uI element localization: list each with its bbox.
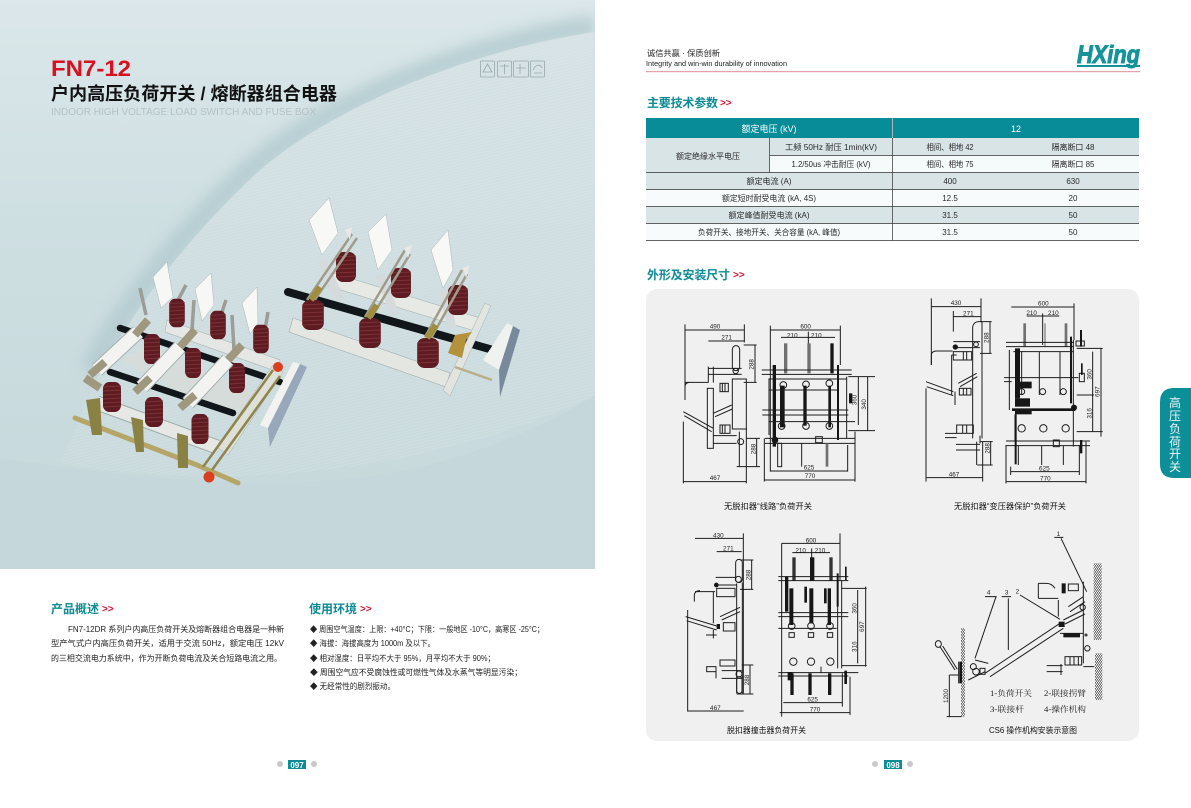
- text block: product overview: 型产气式户内高压负荷开关，适用于交流 50Hz，额定电压 12kV: [51, 638, 285, 648]
- drawing: line load switch: 770: [805, 473, 816, 480]
- logo: HXing: HXing: [1077, 41, 1140, 69]
- side tab: high voltage load switch: 关: [1169, 460, 1181, 474]
- drawing: line load switch: 340: [861, 399, 868, 410]
- side tab: high voltage load switch: 开: [1169, 447, 1181, 461]
- drawing: line load switch: 360: [851, 394, 858, 405]
- table: technical parameters: 额定短时耐受电流 (kA, 4S): [722, 193, 816, 203]
- legend: mechanism parts: 2-联接拐臂: [1044, 688, 1086, 698]
- side tab: high voltage load switch: [1160, 388, 1191, 478]
- table: technical parameters: 额定峰值耐受电流 (kA): [728, 210, 810, 220]
- table: technical parameters: 隔离断口 48: [1052, 142, 1095, 152]
- table: technical parameters: 1.2/50us 冲击耐压 (kV): [792, 159, 871, 169]
- drawing: transformer protection load switch: 288: [984, 332, 991, 343]
- table: technical parameters: 隔离断口 85: [1052, 159, 1095, 169]
- drawing: CS6 operating mechanism installation: [935, 531, 1102, 717]
- drawing: line load switch: 467: [710, 475, 721, 482]
- heading: operating environment: 使用环境: [309, 601, 357, 616]
- header: slogan: 诚信共赢 · 保质创新: [647, 48, 720, 58]
- drawing: transformer protection load switch: 288: [985, 443, 992, 454]
- text block: operating environment list: [310, 624, 544, 691]
- table: technical parameters: 负荷开关、接地开关、关合容量 (kA, 峰值): [698, 227, 840, 237]
- table: technical parameters: 50: [1069, 211, 1078, 220]
- product photo: assembled switch with fuses (left): [75, 262, 307, 483]
- drawing: transformer protection load switch: 467: [949, 471, 960, 478]
- table: technical parameters: 额定绝缘水平电压: [676, 151, 740, 161]
- drawing: striker load switch: 600: [806, 537, 817, 544]
- drawing: CS6 operating mechanism installation: 4: [987, 590, 991, 597]
- drawing: transformer protection load switch: 271: [963, 311, 974, 318]
- text block: product overview: [51, 624, 285, 663]
- page number: 098: 098: [886, 761, 900, 770]
- drawing: CS6 operating mechanism installation: 1200: [943, 688, 950, 703]
- text block: product overview: 的三相交流电力系统中，作为开断负荷电流及关合短路电流之用。: [51, 653, 282, 663]
- drawing: striker load switch: 271: [723, 546, 734, 553]
- side tab: high voltage load switch: 压: [1169, 409, 1181, 423]
- legend: mechanism parts: 3-联接杆: [990, 704, 1024, 714]
- legend: mechanism parts: 4-操作机构: [1044, 704, 1086, 714]
- drawing: line load switch: [683, 324, 875, 483]
- panel: left cover background: [0, 0, 595, 569]
- heading: outline and installation dimensions: >>: [733, 270, 745, 281]
- drawing: transformer protection load switch: 625: [1039, 466, 1050, 473]
- drawing: CS6 operating mechanism installation: 1: [1057, 531, 1061, 538]
- drawing: transformer protection load switch: [926, 298, 1103, 483]
- drawing: transformer protection load switch: 430: [951, 300, 962, 307]
- text block: product overview: FN7-12DR 系列户内高压负荷开关及熔断器组合电器是一种新: [68, 624, 284, 634]
- drawing: line load switch: 490: [710, 324, 721, 331]
- table: technical parameters: 12: [1011, 124, 1021, 134]
- drawing: CS6 operating mechanism installation: 2: [1016, 589, 1020, 596]
- caption: transformer protection load switch: 无脱扣器“变压器保护”负荷开关: [954, 501, 1066, 511]
- caption: line load switch: 无脱扣器“线路”负荷开关: [724, 501, 812, 511]
- heading: main technical parameters: >>: [720, 98, 732, 109]
- drawing: transformer protection load switch: 210: [1026, 310, 1037, 317]
- header: slogan: [646, 48, 787, 68]
- page number: 097: [277, 760, 317, 770]
- section: operating environment: [309, 601, 544, 691]
- product photo: load switch (right): [288, 198, 520, 397]
- table: technical parameters: 50: [1069, 228, 1078, 237]
- table: technical parameters: [646, 118, 1139, 240]
- drawing: line load switch: 288: [749, 359, 756, 370]
- drawing: striker load switch: 288: [744, 674, 751, 685]
- table: technical parameters: 630: [1066, 177, 1080, 186]
- heading: outline and installation dimensions: 外形及安装尺寸: [647, 267, 730, 282]
- page number: 098: [872, 760, 913, 770]
- drawing: striker load switch: [686, 532, 867, 717]
- drawing: line load switch: 210: [787, 333, 798, 340]
- table: technical parameters: 12.5: [942, 194, 958, 203]
- icons: certification marks: [480, 61, 544, 77]
- table: technical parameters: 31.5: [942, 211, 958, 220]
- panel: dimension drawings: [646, 289, 1139, 741]
- text block: operating environment list: ◆ 周围空气应不受腐蚀性或可燃性气体及水蒸气等明显污染；: [310, 667, 522, 677]
- drawing: transformer protection load switch: 316: [1087, 408, 1094, 419]
- drawing: transformer protection load switch: 697: [1094, 386, 1101, 397]
- drawing: striker load switch: 316: [851, 641, 858, 652]
- caption: striker load switch: 脱扣器撞击器负荷开关: [727, 725, 806, 735]
- drawing: striker load switch: 697: [859, 621, 866, 632]
- table: technical parameters: 31.5: [942, 228, 958, 237]
- drawing: striker load switch: 770: [810, 706, 821, 713]
- subtitle: Chinese product name: 户内高压负荷开关 / 熔断器组合电器: [51, 83, 337, 104]
- caption: CS6 mechanism: CS6 操作机构安装示意图: [989, 725, 1077, 735]
- side tab: high voltage load switch: 高: [1169, 395, 1181, 410]
- drawing: transformer protection load switch: 360: [1087, 369, 1094, 380]
- heading: product overview: 产品概述: [51, 601, 99, 616]
- side tab: high voltage load switch: 负: [1169, 422, 1181, 436]
- heading: product overview: >>: [102, 604, 114, 615]
- header: slogan: Integrity and win-win durability of innovation: [646, 59, 787, 68]
- table: technical parameters: 相间、相地 75: [926, 159, 974, 169]
- drawing: line load switch: 600: [800, 324, 811, 331]
- table: technical parameters: 额定电压 (kV): [742, 123, 797, 134]
- text block: operating environment list: ◆ 周围空气温度：上限：+40°C；下限：一般地区 -10°C，高寒区 -25°C；: [310, 624, 544, 634]
- side tab: high voltage load switch: 荷: [1169, 435, 1181, 449]
- text block: operating environment list: ◆ 无经常性的剧烈振动。: [310, 681, 395, 691]
- drawing: striker load switch: 467: [710, 705, 721, 712]
- drawing: transformer protection load switch: 210: [1048, 310, 1059, 317]
- table: technical parameters: 400: [943, 177, 957, 186]
- subtitle: English product name: INDOOR HIGH VOLTAGE LOAD SWITCH AND FUSE BOX: [51, 107, 316, 118]
- drawing: line load switch: 625: [804, 465, 815, 472]
- drawing: CS6 operating mechanism installation: 3: [1005, 590, 1009, 597]
- drawing: transformer protection load switch: 770: [1040, 476, 1051, 483]
- table: technical parameters: 相间、相地 42: [926, 142, 974, 152]
- heading: operating environment: >>: [360, 604, 372, 615]
- drawing: striker load switch: 625: [807, 697, 818, 704]
- drawing: transformer protection load switch: 600: [1038, 301, 1049, 308]
- legend: mechanism parts: [990, 688, 1086, 714]
- drawing: striker load switch: 288: [745, 569, 752, 580]
- drawing: striker load switch: 210: [815, 547, 826, 554]
- text block: operating environment list: ◆ 海拔：海拔高度为 1000m 及以下。: [310, 638, 435, 648]
- table: technical parameters: 额定电流 (A): [746, 176, 792, 186]
- drawing: striker load switch: 210: [795, 547, 806, 554]
- page number: 097: 097: [290, 761, 304, 770]
- heading: main technical parameters: 主要技术参数: [647, 95, 718, 110]
- table: technical parameters: 20: [1069, 194, 1078, 203]
- drawing: striker load switch: 430: [713, 532, 724, 539]
- section: product overview: [51, 601, 285, 663]
- drawing: line load switch: 288: [751, 443, 758, 454]
- table: technical parameters: 工频 50Hz 耐压 1min(kV): [785, 142, 877, 152]
- drawing: line load switch: 210: [811, 333, 822, 340]
- drawing: striker load switch: 360: [851, 603, 858, 614]
- title: FN7-12: FN7-12: [51, 56, 131, 81]
- text block: operating environment list: ◆ 相对湿度：日平均不大于 95%，月平均不大于 90%；: [310, 653, 495, 663]
- legend: mechanism parts: 1-负荷开关: [990, 688, 1032, 698]
- drawing: line load switch: 271: [721, 335, 732, 342]
